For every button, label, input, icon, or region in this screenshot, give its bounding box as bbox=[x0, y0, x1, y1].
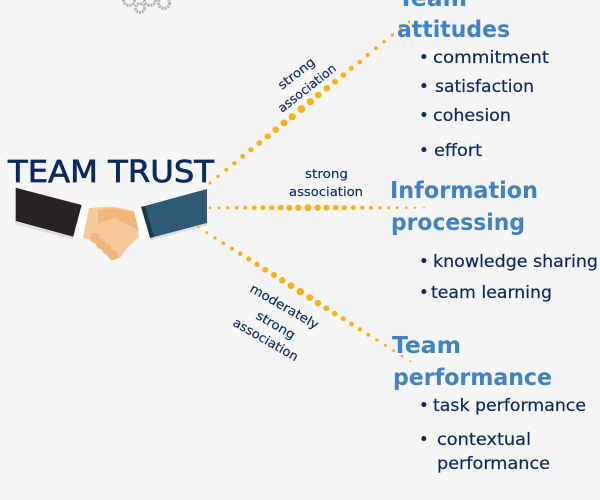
sleeve shadows bbox=[16, 222, 73, 240]
heading: information processing: processing bbox=[391, 208, 525, 236]
right sleeve bbox=[141, 189, 207, 238]
label: moderately strong association bbox=[230, 281, 322, 364]
heading: team performance: Team bbox=[392, 331, 461, 359]
list: team performance items: task performance bbox=[433, 396, 586, 415]
heading: team performance bbox=[392, 331, 552, 391]
dotted line: team trust to information processing bbox=[209, 204, 425, 211]
title: team trust: TEAM TRUST bbox=[7, 155, 214, 190]
list: team attitudes items: • bbox=[419, 77, 429, 96]
hands bbox=[83, 206, 139, 260]
heading: team attitudes: attitudes bbox=[397, 15, 510, 43]
list: team attitudes items: • bbox=[419, 141, 429, 160]
list: information processing items: • bbox=[419, 283, 429, 302]
label: strong association, middle bbox=[289, 166, 363, 199]
list: team attitudes items: • bbox=[419, 48, 429, 67]
label: moderately strong association: association bbox=[230, 315, 301, 364]
list: team attitudes items: commitment bbox=[433, 48, 550, 67]
label: moderately strong association: strong bbox=[254, 308, 298, 342]
list: team performance items: • bbox=[419, 396, 429, 415]
label: strong association, middle: strong bbox=[305, 166, 348, 181]
list: team attitudes items: • bbox=[419, 106, 429, 125]
list: information processing items: team learning bbox=[431, 283, 552, 302]
list: team performance items bbox=[419, 396, 586, 473]
label: moderately strong association: moderately bbox=[248, 281, 322, 332]
heading: team attitudes bbox=[397, 0, 510, 43]
dotted line: team trust to team attitudes bbox=[208, 20, 410, 185]
fingers bbox=[90, 233, 100, 243]
left cuff bbox=[73, 205, 89, 239]
right cuff bbox=[134, 207, 150, 240]
list: team attitudes items bbox=[419, 48, 550, 160]
icon: handshake bbox=[16, 188, 207, 260]
label: strong association, middle: association bbox=[289, 184, 363, 199]
left sleeve bbox=[16, 188, 82, 237]
list: team performance items: performance bbox=[437, 454, 550, 473]
label: strong association, upper: association bbox=[275, 60, 339, 115]
list: team performance items: contextual bbox=[437, 430, 531, 449]
heading: information processing bbox=[390, 176, 538, 236]
list: information processing items bbox=[419, 252, 598, 302]
list: information processing items: knowledge sharing bbox=[433, 252, 598, 271]
heading: team performance: performance bbox=[393, 363, 552, 391]
label: strong association, upper: strong bbox=[275, 54, 318, 92]
list: team attitudes items: satisfaction bbox=[435, 77, 534, 96]
heading: information processing: Information bbox=[390, 176, 538, 204]
list: team attitudes items: cohesion bbox=[433, 106, 511, 125]
icon: gears bbox=[124, 0, 170, 12]
list: team attitudes items: effort bbox=[434, 141, 483, 160]
list: information processing items: • bbox=[419, 252, 429, 271]
dotted line: team trust to team performance bbox=[197, 226, 411, 362]
list: team performance items: • bbox=[419, 430, 429, 449]
